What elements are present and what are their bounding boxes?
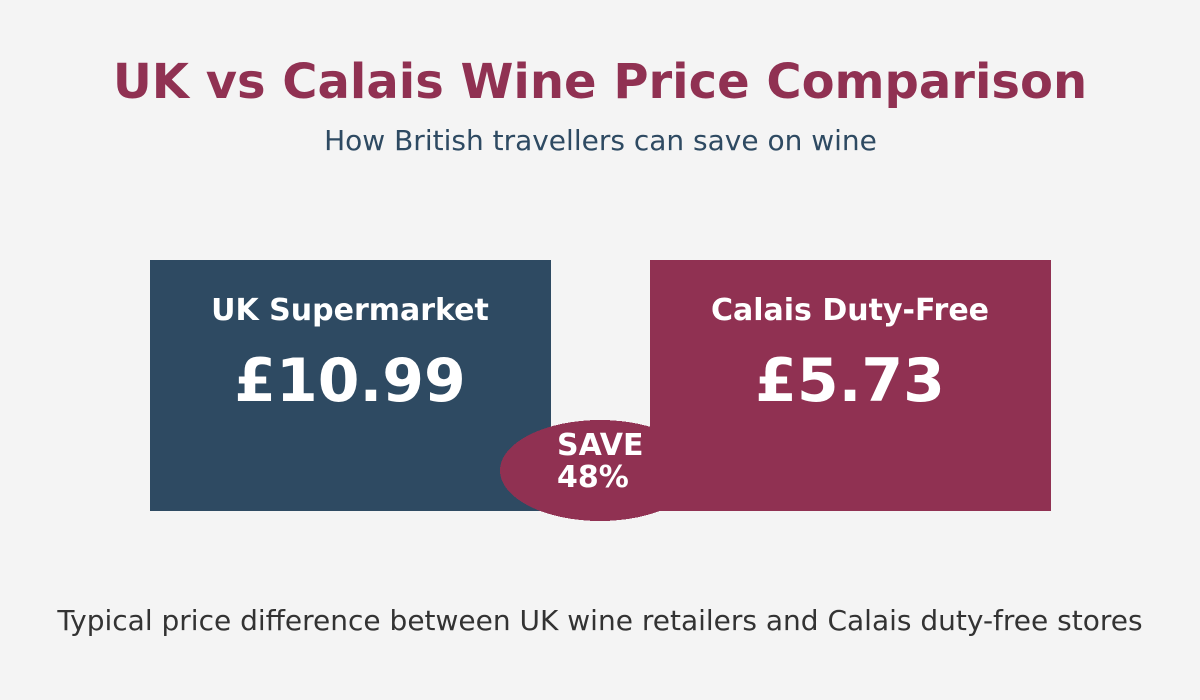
panel: Calais duty-free (650, 260, 1051, 511)
price: Calais: £5.73 (755, 346, 945, 416)
badge text: 48%: 48% (557, 460, 629, 495)
panel: UK supermarket (150, 260, 551, 511)
badge text: SAVE: SAVE (557, 428, 644, 463)
subtitle: How British travellers can save on wine (324, 124, 877, 157)
panel heading: UK Supermarket: UK Supermarket (211, 293, 489, 328)
savings badge (500, 420, 700, 521)
caption: Typical price difference between UK wine retailers and Calais duty-free stores (56, 604, 1143, 637)
price: UK: £10.99 (234, 346, 466, 416)
title: UK vs Calais Wine Price Comparison (113, 54, 1087, 110)
panel heading: Calais Duty-Free: Calais Duty-Free (711, 293, 989, 328)
